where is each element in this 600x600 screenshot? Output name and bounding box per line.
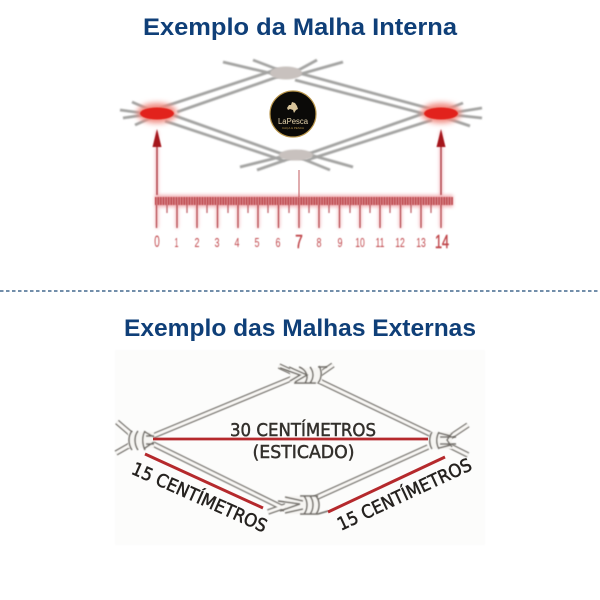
ruler numbers: 5 [254,236,260,250]
dashed divider [0,290,600,292]
mesh strands [120,60,482,170]
bottom knot [279,150,313,160]
ruler numbers: 14 [435,232,449,252]
ruler numbers: 11 [376,236,385,250]
ruler and arrow glow [155,131,453,228]
title: inner mesh: Exemplo da Malha Interna [143,14,458,41]
ruler numbers: 4 [234,236,240,250]
title: outer meshes: Exemplo das Malhas Externas [124,315,476,342]
top knot [270,66,302,80]
ruler numbers: 13 [416,236,426,250]
ruler numbers: 1 [174,236,179,250]
label: right 15 centimetros: 15 CENTÍMETROS [334,454,475,535]
center tick [298,170,300,197]
top knot [280,366,327,383]
left arrow [152,129,162,195]
ruler [155,197,453,228]
rope strands [116,365,468,512]
left red glow [137,103,177,123]
ruler numbers: 8 [316,236,322,250]
red measure: 30 cm [153,438,428,440]
label: 30 centimetros: 30 CENTÍMETROS [230,419,376,441]
ruler numbers: 12 [395,236,405,250]
right knot [430,432,456,449]
ruler numbers: 3 [214,236,220,250]
right arrow [436,129,446,195]
ruler numbers: 10 [355,236,365,250]
ruler numbers: 9 [338,236,343,250]
red measure: right 15 cm [328,457,445,512]
ruler numbers: 6 [276,236,281,250]
ruler numbers [154,232,449,252]
left red marker [140,108,174,120]
label: left 15 centimetros: 15 CENTÍMETROS [128,458,271,537]
red measure: left 15 cm [145,454,263,508]
label: esticado: (ESTICADO) [252,442,354,463]
left knot [128,431,154,450]
ruler numbers: 7 [295,232,303,252]
logo badge [270,91,316,137]
right red marker [424,108,458,120]
diagram: inner mesh [120,60,482,252]
logo badge: LaPesca [278,117,309,126]
ruler numbers: 2 [194,236,200,250]
photo background [115,350,485,545]
ruler numbers: 0 [154,232,160,251]
diagram: outer mesh [115,350,485,545]
bottom knot [278,496,328,514]
logo badge: CAÇA & PESCA [282,126,304,130]
right red glow [421,103,461,123]
